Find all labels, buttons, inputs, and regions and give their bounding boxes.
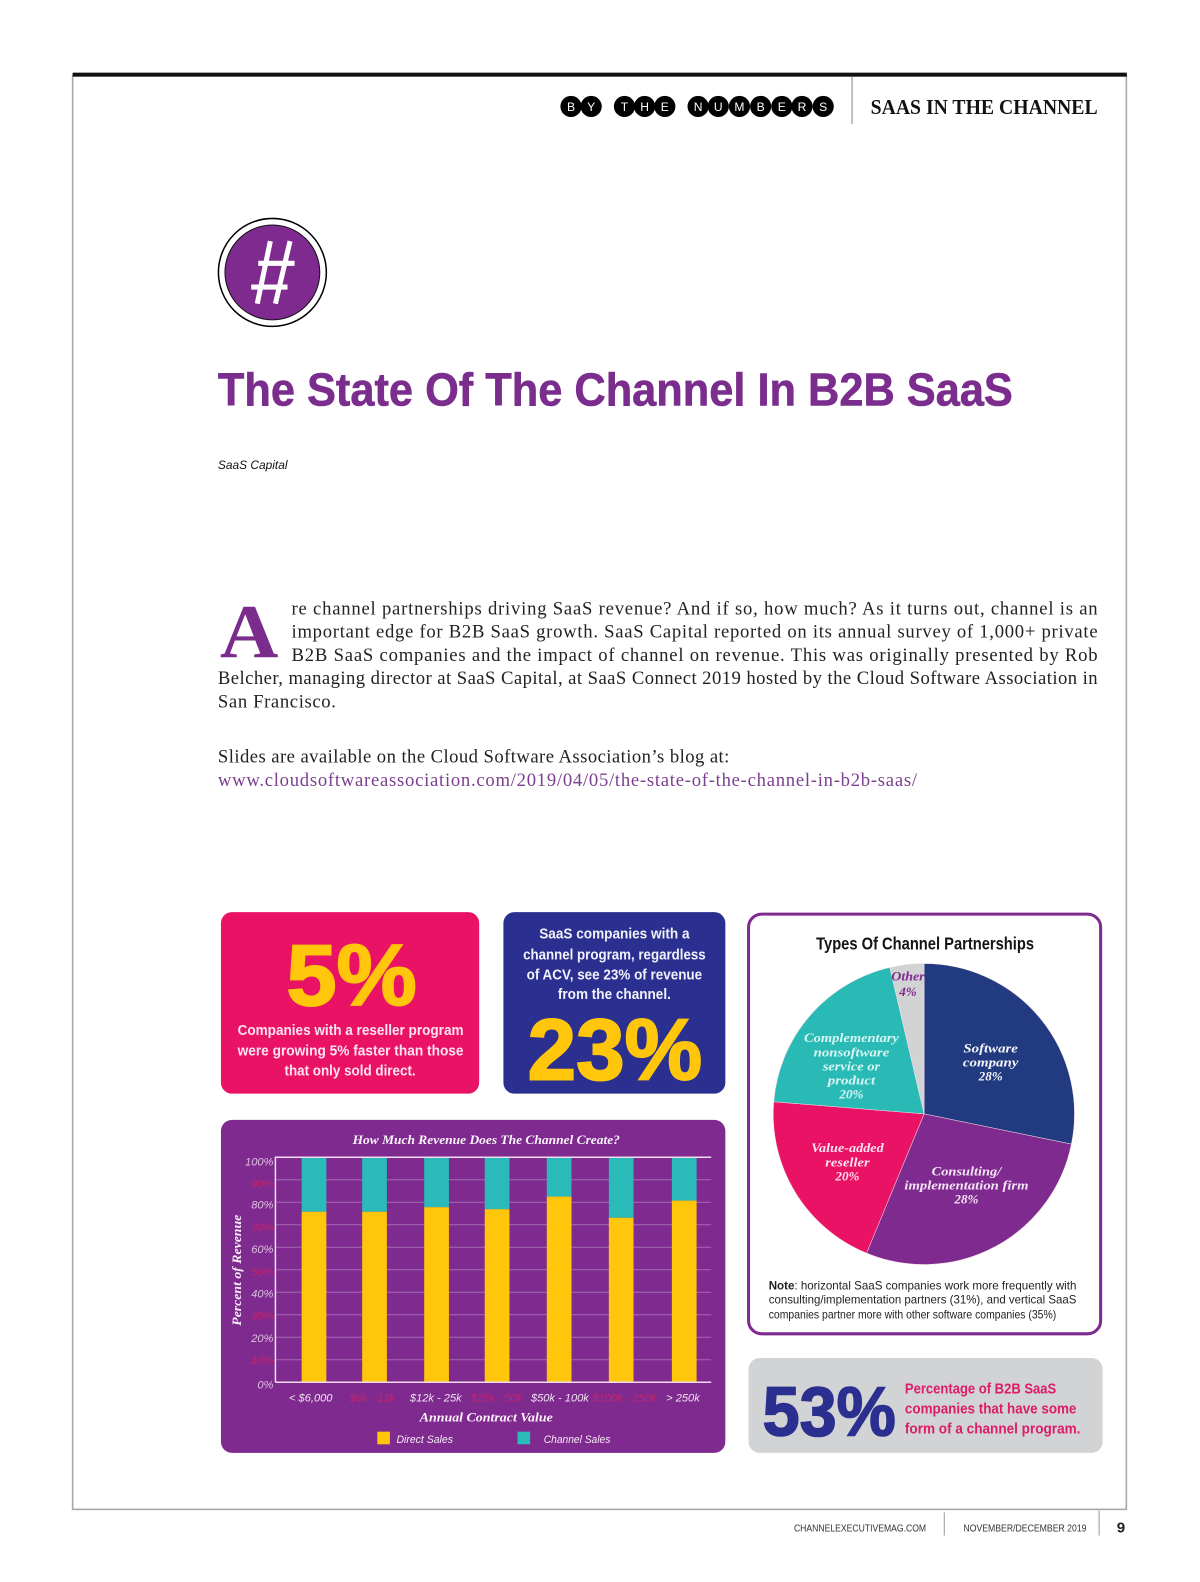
stat description: channel program, regardless (523, 946, 706, 963)
stat description: Companies with a reseller program (238, 1022, 464, 1039)
header: by the numbers badges: Y (587, 100, 595, 114)
legend (377, 1432, 611, 1446)
page frame (73, 73, 1127, 1509)
panel: 53 percent stat (749, 1358, 1103, 1453)
x axis labels: $6k - 12k (348, 1392, 395, 1404)
x axis labels: < $6,000 (289, 1392, 333, 1404)
header: section name: SAAS IN THE CHANNEL (871, 97, 1098, 119)
pie labels: Software (963, 1040, 1018, 1055)
footer: NOVEMBER/DECEMBER 2019 (963, 1524, 1087, 1535)
stat description (905, 1380, 1080, 1438)
pie chart (773, 964, 1074, 1265)
header: by the numbers badges: S (819, 100, 827, 114)
body paragraph: important edge for B2B SaaS growth. SaaS Capital reported on its annual survey of 1,000+ private (292, 622, 1098, 643)
body paragraph: Belcher, managing director at SaaS Capital, at SaaS Connect 2019 hosted by the Cloud Software Association in (218, 668, 1098, 689)
note (769, 1279, 1077, 1322)
big number: 53%: 53% (763, 1373, 896, 1451)
note: companies partner more with other software companies (35%) (769, 1309, 1056, 1322)
y axis labels: 50% (251, 1266, 274, 1278)
pie labels: reseller (825, 1154, 871, 1169)
panel: 23 percent stat (503, 912, 725, 1099)
stat description: SaaS companies with a (539, 925, 690, 942)
x axis labels: $100k - 250k (591, 1392, 657, 1404)
byline: SaaS Capital (218, 458, 288, 472)
x axis labels: > 250k (666, 1392, 700, 1404)
body paragraph: B2B SaaS companies and the impact of channel on revenue. This was originally presented by Rob (292, 645, 1098, 666)
stat description: that only sold direct. (284, 1063, 416, 1080)
stat description (523, 925, 706, 1003)
drop cap: A (220, 589, 278, 674)
x axis labels (289, 1392, 700, 1404)
y axis labels (245, 1156, 274, 1391)
stat description: form of a channel program. (905, 1421, 1080, 1438)
pie labels: implementation firm (904, 1178, 1028, 1193)
stat description: Percentage of B2B SaaS (905, 1380, 1056, 1397)
x axis labels: $25k - 50k (469, 1392, 523, 1404)
x axis title: Annual Contract Value (419, 1410, 553, 1425)
y axis labels: 20% (250, 1333, 274, 1345)
body paragraph: re channel partnerships driving SaaS revenue? And if so, how much? As it turns out, channel is an (292, 598, 1098, 619)
slides link text (218, 747, 918, 791)
y axis labels: 0% (257, 1379, 274, 1391)
header: by the numbers badges: N (694, 100, 702, 114)
pie labels: Complementary (804, 1030, 899, 1045)
body paragraph (218, 598, 1098, 712)
big number: 5%: 5% (287, 927, 417, 1024)
icon: hash badge (218, 218, 326, 326)
pie labels: company (963, 1054, 1019, 1069)
header: by the numbers badges: B (757, 100, 765, 114)
header: by the numbers badges (560, 96, 834, 117)
footer: CHANNELEXECUTIVEMAG.COM (794, 1524, 926, 1535)
title: The State Of The Channel In B2B SaaS (218, 364, 1013, 416)
stacked bars (302, 1157, 697, 1382)
note: consulting/implementation partners (31%), and vertical SaaS (769, 1294, 1077, 1307)
header: by the numbers badges: E (778, 100, 786, 114)
stat description: of ACV, see 23% of revenue (527, 967, 702, 984)
header: by the numbers badges: U (714, 100, 723, 114)
stat description (237, 1022, 464, 1080)
panel: revenue bar chart (221, 1120, 725, 1453)
slides link text: www.cloudsoftwareassociation.com/2019/04/05/the-state-of-the-channel-in-b2b-saas/ (218, 770, 918, 791)
body paragraph: San Francisco. (218, 691, 336, 712)
pie labels: 20% (838, 1087, 864, 1102)
legend: Channel Sales (544, 1434, 611, 1446)
pie labels: Other (891, 969, 926, 984)
y axis labels: 30% (251, 1311, 274, 1323)
x axis labels: $12k - 25k (409, 1392, 462, 1404)
y axis labels: 70% (251, 1222, 274, 1234)
slides link text: Slides are available on the Cloud Software Association’s blog at: (218, 747, 729, 768)
pie labels: Consulting/ (932, 1163, 1003, 1178)
stat description: companies that have some (905, 1401, 1076, 1418)
header: by the numbers badges: E (661, 100, 669, 114)
legend: Direct Sales (396, 1434, 453, 1446)
header: by the numbers badges: B (567, 100, 575, 114)
y axis labels: 100% (245, 1156, 274, 1168)
header: by the numbers badges: T (621, 100, 629, 114)
panel title: Types Of Channel Partnerships (816, 933, 1034, 953)
y axis labels: 10% (251, 1355, 274, 1367)
pie labels: 28% (978, 1069, 1003, 1084)
pie labels: Value-added (811, 1140, 884, 1155)
note: Note: horizontal SaaS companies work more frequently with (769, 1279, 1076, 1292)
header: by the numbers badges: R (798, 100, 807, 114)
stat description: from the channel. (558, 986, 671, 1003)
y axis labels: 60% (251, 1244, 274, 1256)
stat description: were growing 5% faster than those (237, 1042, 464, 1059)
big number: 23%: 23% (528, 1002, 702, 1099)
pie labels: nonsoftware (814, 1044, 889, 1059)
pie labels: 4% (898, 984, 917, 999)
panel: channel partnership types (749, 914, 1101, 1334)
pie labels (804, 969, 1028, 1207)
y axis labels: 40% (251, 1288, 274, 1300)
y axis labels: 90% (251, 1179, 274, 1191)
y axis title: Percent of Revenue (230, 1214, 244, 1326)
x axis labels: $50k - 100k (530, 1392, 589, 1404)
header: by the numbers badges: H (640, 100, 649, 114)
pie labels: product (827, 1073, 876, 1088)
pie labels: 20% (834, 1168, 860, 1183)
footer (794, 1510, 1125, 1537)
pie labels: 28% (953, 1192, 979, 1207)
chart title: How Much Revenue Does The Channel Create? (352, 1132, 620, 1147)
footer: 9 (1117, 1520, 1125, 1537)
y axis labels: 80% (251, 1200, 274, 1212)
header: by the numbers badges: M (734, 100, 745, 114)
panel: 5 percent stat (221, 912, 479, 1094)
pie labels: service or (822, 1058, 881, 1073)
